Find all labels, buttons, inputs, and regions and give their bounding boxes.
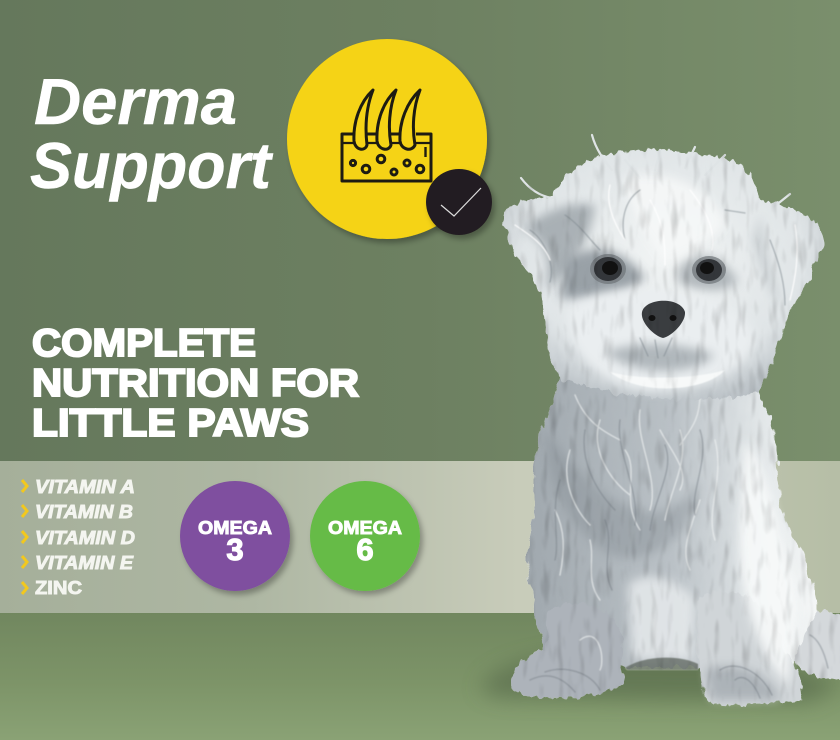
fur strokes on chest [530,395,828,698]
head fur strokes [515,185,797,358]
list items: VITAMIN B [35,502,133,522]
list items: VITAMIN D [35,528,135,548]
belly light [628,577,695,660]
tail [790,611,840,679]
badge: skin and coat icon [287,39,492,239]
muzzle [568,290,755,391]
title: Derma Support: Support [30,129,273,202]
list items: VITAMIN E [35,553,134,573]
loose hair tufts [521,135,790,206]
list items: ZINC [35,578,82,598]
title: Derma Support [30,65,273,202]
right side highlight [739,440,797,685]
illustration: white puppy [503,135,840,704]
translucent nutrient band [0,461,840,613]
forehead highlight [625,175,725,262]
heading: complete nutrition: LITTLE PAWS [32,402,309,445]
badge: omega 3: 3 [226,532,244,567]
dark check badge [426,169,492,235]
badge: omega 3: OMEGA [198,517,272,538]
eye socket shading [560,249,645,298]
heading: complete nutrition [32,322,359,445]
right foreleg and paw [697,590,804,704]
right ear edge shade [752,215,782,305]
left eye [590,254,626,284]
head and ears [503,150,824,400]
nose [642,301,685,338]
list items [35,477,135,598]
heading: complete nutrition: NUTRITION FOR [32,362,359,405]
floor [0,613,840,740]
yellow circle [287,39,487,239]
chin highlight [610,370,725,388]
icon: hair follicles in skin [342,90,431,181]
left foreleg and paw [510,603,623,698]
dog floor shadow [480,649,840,702]
list items: VITAMIN A [35,477,135,497]
badge: omega 6: 6 [356,532,374,567]
chest shading [545,430,700,558]
mouth shading [605,344,715,371]
badge: omega 6 [310,481,420,591]
chevrons [22,480,27,594]
list: vitamins and minerals [22,477,135,598]
badge: omega 6: OMEGA [328,517,402,538]
gap between forelegs [625,658,698,670]
body [527,375,818,680]
right eye [692,256,726,284]
title: Derma Support: Derma [34,65,237,138]
heading: complete nutrition: COMPLETE [32,322,256,365]
right paw inner shade [705,666,780,700]
left ear shading [522,204,595,290]
badge: omega 3 [180,481,290,591]
